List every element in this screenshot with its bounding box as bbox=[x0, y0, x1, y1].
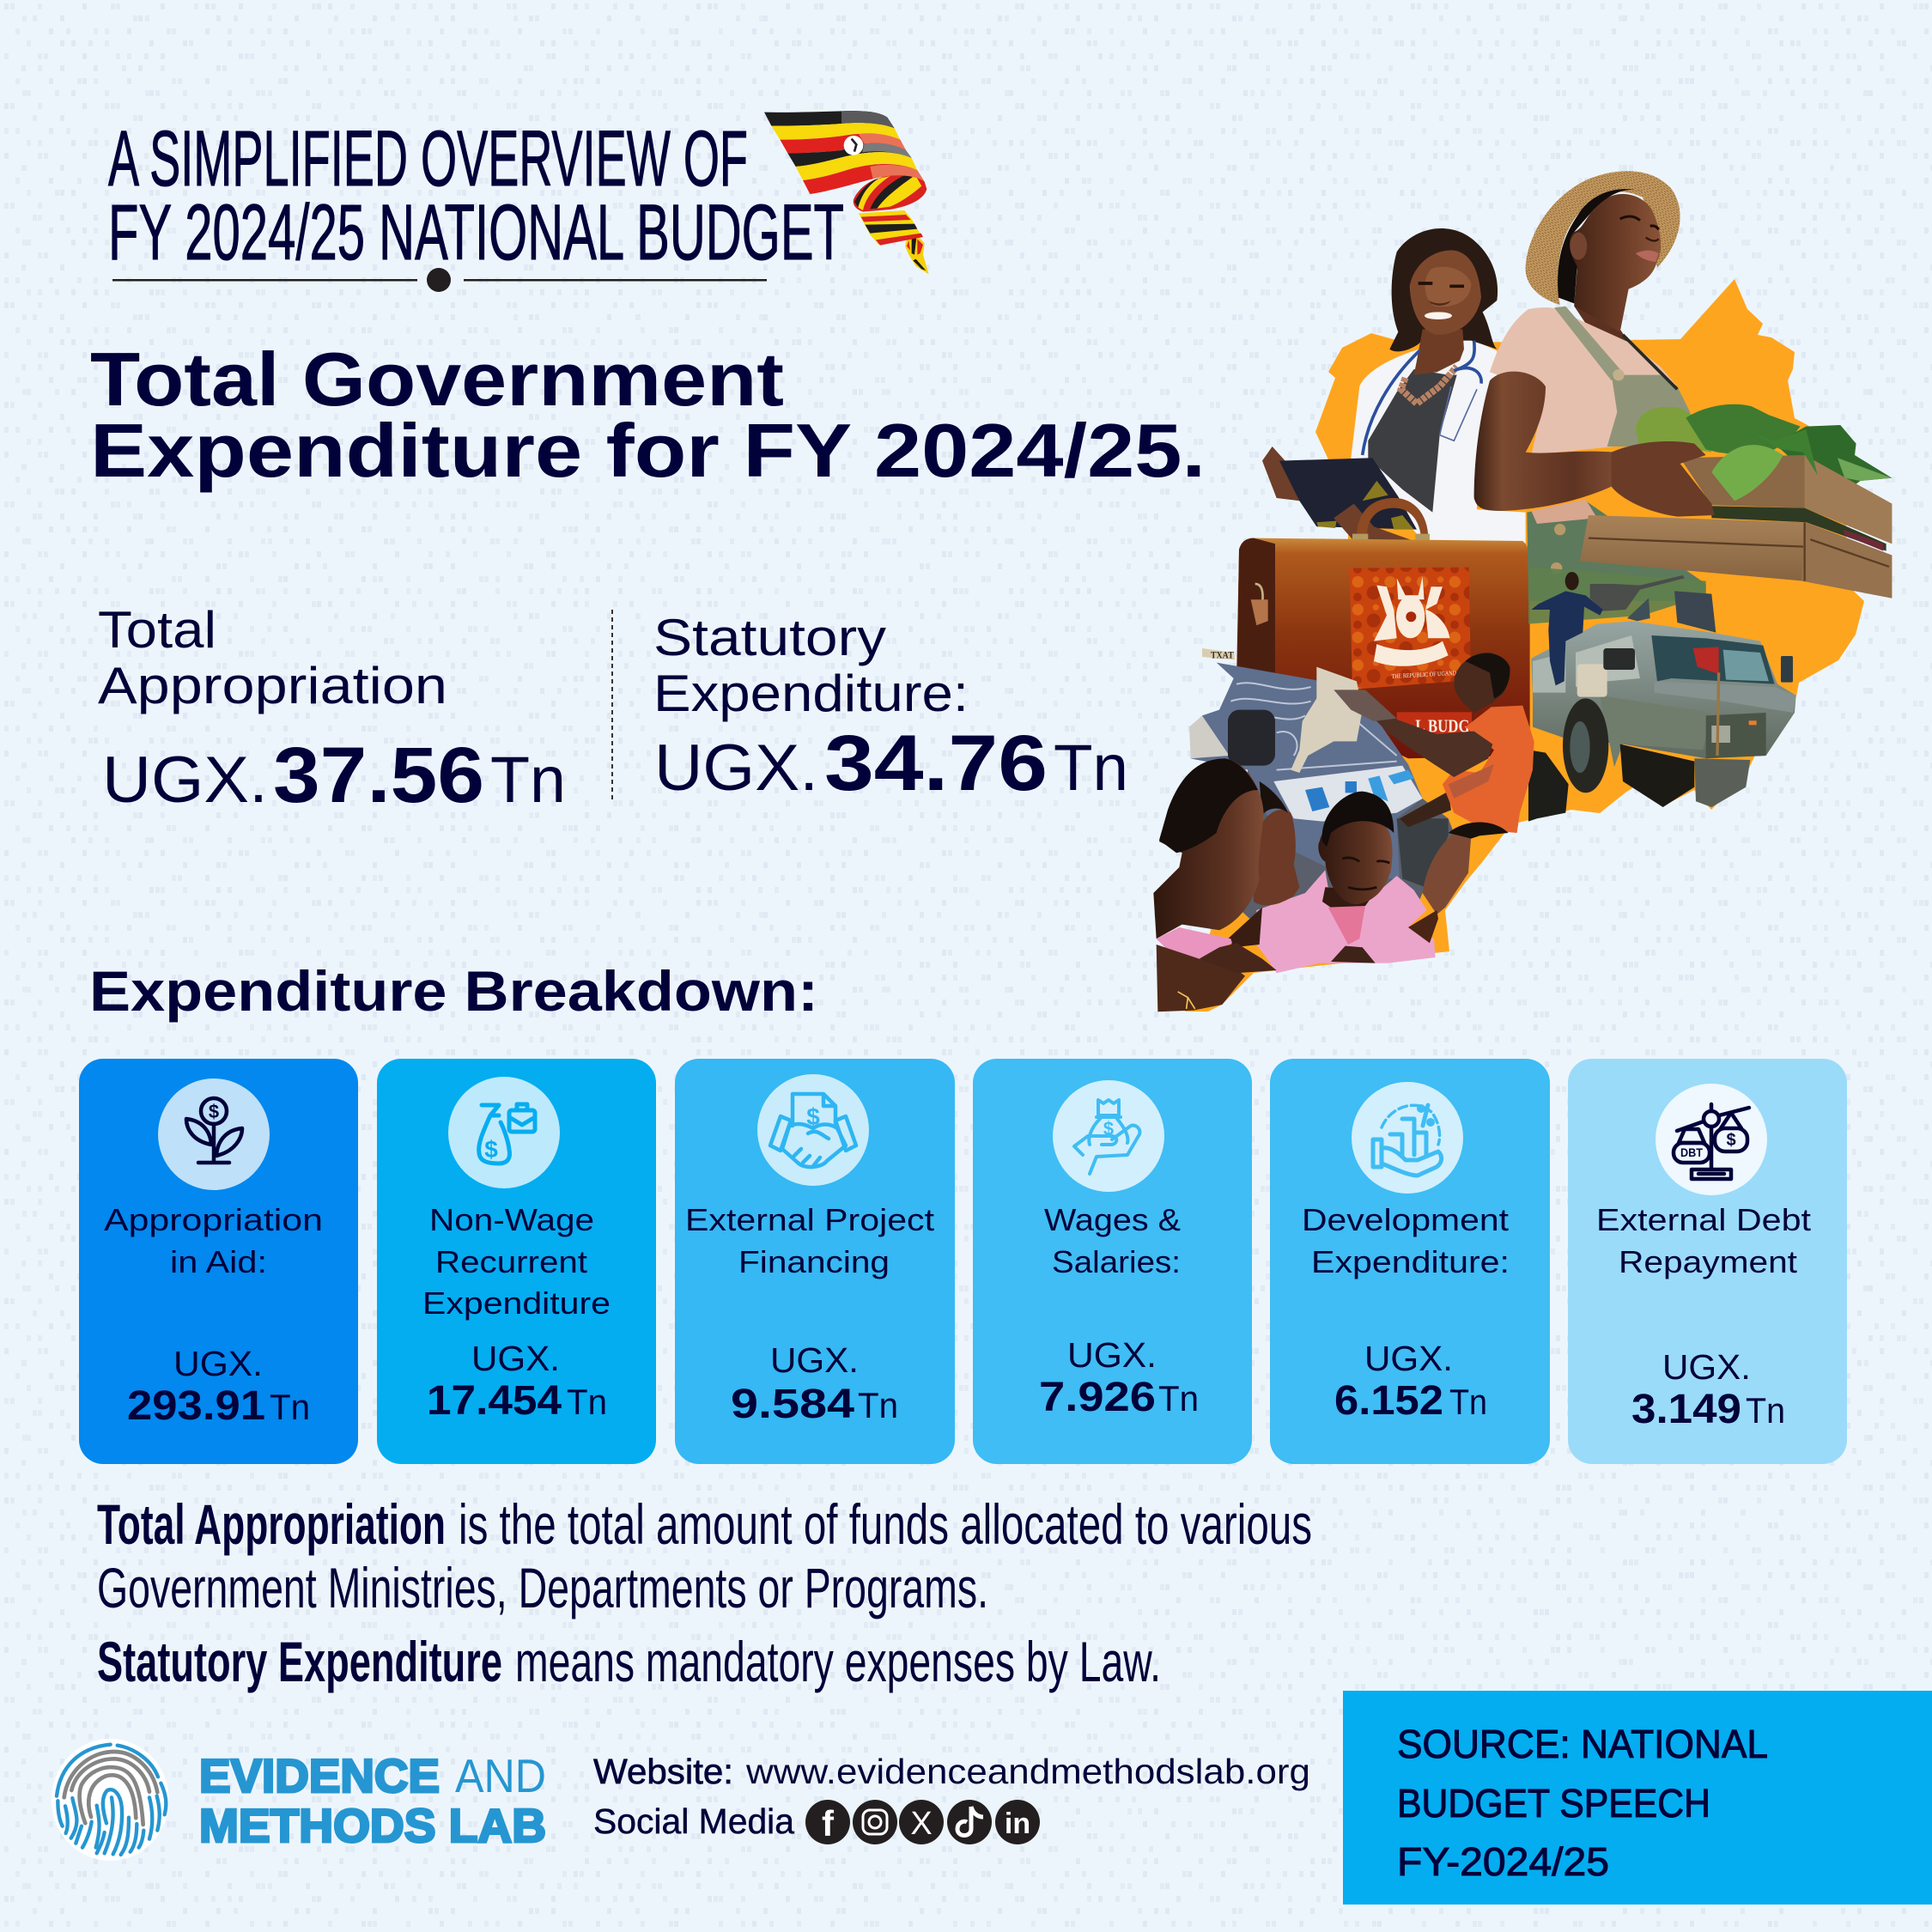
total appropriation bbox=[98, 601, 566, 819]
card label bbox=[1302, 1202, 1510, 1279]
orange Uganda map bbox=[1185, 279, 1864, 1012]
icon: x bbox=[899, 1800, 944, 1844]
card value: Tn bbox=[567, 1382, 607, 1422]
farmer bbox=[1474, 171, 1892, 601]
icon: hand holding money bag: $ bbox=[1103, 1118, 1114, 1139]
card label: Salaries: bbox=[1052, 1244, 1181, 1279]
card value: UGX. bbox=[770, 1340, 859, 1380]
title bbox=[108, 115, 844, 276]
statutory expenditure bbox=[653, 609, 1128, 807]
source callout: SOURCE: NATIONAL bbox=[1397, 1722, 1768, 1766]
card value: Tn bbox=[1158, 1378, 1199, 1419]
card value: UGX. bbox=[1662, 1347, 1751, 1387]
panel: external debt repayment bbox=[1568, 1059, 1847, 1464]
card label: in Aid: bbox=[170, 1244, 267, 1279]
icon: document and handshake: $ bbox=[806, 1103, 820, 1130]
statutory expenditure: Tn bbox=[1054, 732, 1128, 805]
car being washed: TXAT bbox=[1211, 651, 1234, 661]
heading: expenditure breakdown: Expenditure Breakdown: bbox=[89, 959, 818, 1023]
social media: Social Media bbox=[593, 1801, 794, 1841]
panel: non-wage recurrent expenditure bbox=[377, 1059, 656, 1464]
source callout: FY-2024/25 bbox=[1397, 1839, 1609, 1884]
card label bbox=[104, 1202, 323, 1279]
statutory expenditure: UGX. bbox=[654, 732, 818, 805]
title underline with dot bbox=[112, 268, 767, 292]
budget briefcase: THE REPUBLIC OF UGANDA bbox=[1391, 669, 1461, 680]
card value: UGX. bbox=[173, 1344, 263, 1383]
icon: Uganda flag ribbon bbox=[764, 111, 929, 274]
card value bbox=[1631, 1347, 1785, 1432]
school children bbox=[1153, 758, 1509, 1012]
definitions text block: Government Ministries, Departments or Programs. bbox=[97, 1556, 988, 1619]
icon: money bag and briefcase: $ bbox=[484, 1136, 498, 1163]
icon: plant with dollar: $ bbox=[209, 1101, 219, 1122]
card value bbox=[1334, 1339, 1487, 1424]
card value: 9.584 bbox=[731, 1382, 854, 1427]
source callout: BUDGET SPEECH bbox=[1397, 1781, 1710, 1826]
icon: linkedin bbox=[995, 1800, 1040, 1844]
total appropriation: Total bbox=[98, 601, 216, 659]
icon: tiktok bbox=[947, 1800, 992, 1844]
title: FY 2024/25 NATIONAL BUDGET bbox=[108, 189, 844, 276]
card value bbox=[1039, 1335, 1199, 1420]
definitions text block: Statutory Expenditure bbox=[97, 1630, 502, 1693]
statutory expenditure: Expenditure: bbox=[653, 665, 969, 722]
panel: development expenditure bbox=[1270, 1059, 1550, 1464]
source callout bbox=[1343, 1691, 1932, 1905]
icon: debt scales: DBT bbox=[1680, 1145, 1703, 1159]
total appropriation: Tn bbox=[490, 744, 566, 817]
title: A SIMPLIFIED OVERVIEW OF bbox=[108, 115, 748, 203]
logo wordmark bbox=[199, 1749, 546, 1852]
icon: x: X bbox=[910, 1806, 933, 1842]
card value: UGX. bbox=[1364, 1339, 1453, 1378]
icon: linkedin: in bbox=[1005, 1807, 1030, 1840]
card value: UGX. bbox=[471, 1339, 560, 1378]
logo wordmark: AND bbox=[455, 1749, 546, 1802]
card label: Expenditure bbox=[422, 1285, 611, 1321]
panel: wages and salaries bbox=[973, 1059, 1252, 1464]
icon: facebook: f bbox=[822, 1803, 835, 1844]
panel: appropriation in aid bbox=[79, 1059, 358, 1464]
heading bbox=[90, 337, 1206, 493]
logo wordmark: EVIDENCE bbox=[199, 1749, 440, 1802]
statutory expenditure: Statutory bbox=[653, 609, 886, 666]
website: www.evidenceandmethodslab.org bbox=[745, 1752, 1310, 1791]
card value: 17.454 bbox=[427, 1378, 562, 1424]
man washing car: L BUDG bbox=[1415, 716, 1470, 737]
card value: 293.91 bbox=[127, 1383, 265, 1429]
card value: 3.149 bbox=[1631, 1387, 1741, 1432]
total appropriation: 37.56 bbox=[273, 732, 484, 819]
illustration: Uganda map photo collage bbox=[1153, 171, 1892, 1012]
card value: UGX. bbox=[1067, 1335, 1157, 1375]
card value: 7.926 bbox=[1039, 1375, 1156, 1420]
total appropriation: Appropriation bbox=[98, 657, 447, 714]
heading: Total Government bbox=[90, 337, 784, 422]
card label: Development bbox=[1302, 1202, 1509, 1237]
card label: Appropriation bbox=[104, 1202, 323, 1237]
card value bbox=[731, 1340, 898, 1427]
icon: debt scales bbox=[1656, 1084, 1767, 1195]
definitions text block: Total Appropriation bbox=[97, 1492, 446, 1556]
definitions text block bbox=[97, 1492, 1312, 1693]
logo: fingerprint bbox=[52, 1739, 169, 1861]
icon: hand holding money bag bbox=[1053, 1080, 1164, 1192]
total appropriation: UGX. bbox=[102, 744, 268, 817]
icon: growth chart in hand bbox=[1352, 1082, 1463, 1194]
card label bbox=[422, 1202, 611, 1321]
card value bbox=[427, 1339, 607, 1424]
doctor bbox=[1262, 228, 1526, 544]
budget briefcase bbox=[1236, 498, 1530, 758]
card label: Repayment bbox=[1619, 1244, 1797, 1279]
armored vehicle bbox=[1528, 567, 1796, 822]
statutory expenditure: 34.76 bbox=[824, 720, 1048, 807]
icon: money bag and briefcase bbox=[448, 1077, 560, 1188]
card label: Recurrent bbox=[435, 1244, 587, 1279]
definitions text block: is the total amount of funds allocated to various bbox=[459, 1492, 1312, 1556]
card value: Tn bbox=[1746, 1390, 1785, 1431]
icon: debt scales: $ bbox=[1726, 1131, 1736, 1150]
icon: facebook bbox=[805, 1800, 850, 1844]
social media bbox=[593, 1800, 1040, 1844]
panel: external project financing bbox=[675, 1059, 955, 1464]
icon: instagram bbox=[853, 1800, 897, 1844]
icon: document and handshake bbox=[757, 1074, 869, 1186]
logo wordmark: METHODS LAB bbox=[199, 1799, 546, 1852]
card label: External Project bbox=[685, 1202, 934, 1237]
card label bbox=[1596, 1202, 1811, 1279]
card value: Tn bbox=[858, 1385, 898, 1425]
card label: External Debt bbox=[1596, 1202, 1811, 1237]
website: Website: bbox=[593, 1752, 733, 1791]
card label: Financing bbox=[738, 1244, 890, 1279]
card label bbox=[685, 1202, 934, 1279]
heading: Expenditure for FY 2024/25. bbox=[90, 408, 1206, 493]
card value bbox=[127, 1344, 310, 1429]
card label: Non-Wage bbox=[429, 1202, 594, 1237]
card label: Expenditure: bbox=[1311, 1244, 1510, 1279]
card label: Wages & bbox=[1044, 1202, 1181, 1237]
car being washed bbox=[1189, 648, 1454, 933]
icon: plant with dollar bbox=[158, 1078, 270, 1190]
card label bbox=[1044, 1202, 1181, 1279]
card value: Tn bbox=[270, 1387, 310, 1427]
man washing car bbox=[1291, 653, 1534, 833]
definitions text block: means mandatory expenses by Law. bbox=[515, 1630, 1161, 1693]
card value: 6.152 bbox=[1334, 1378, 1443, 1424]
card value: Tn bbox=[1449, 1382, 1487, 1422]
